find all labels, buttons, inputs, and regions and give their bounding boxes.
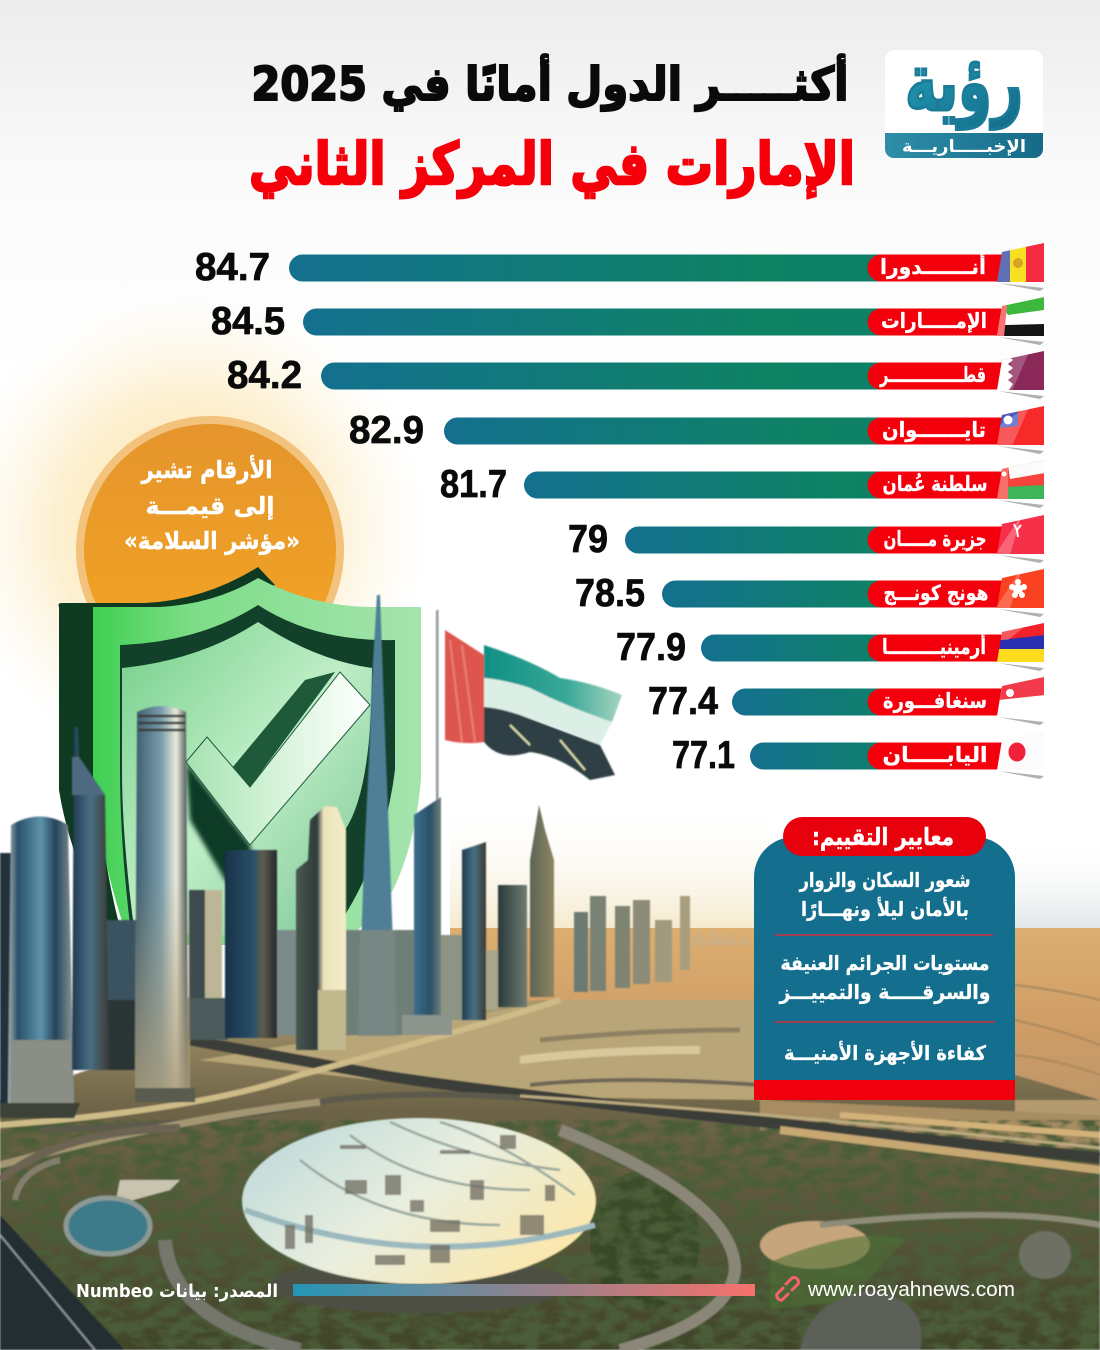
row: Singapore: سنغافـــورة (883, 689, 987, 713)
row: Singapore: 77.4 (648, 680, 718, 723)
row: UAE: 84.5 (211, 300, 285, 343)
shield with check mark (58, 567, 421, 945)
row: Armenia: 77.9 (616, 626, 686, 669)
badge: safety index note (76, 416, 344, 684)
row: Oman: 81.7 (440, 463, 507, 506)
row: Qatar (227, 350, 1045, 399)
panel: evaluation criteria: مستويات الجرائم العنيفة (780, 951, 990, 975)
row: Isle of Man: جزيرة مـــــان (884, 527, 986, 551)
row: Hong Kong: هونج كونـــج (884, 581, 988, 605)
logo: Roayah News: رؤية (905, 36, 1023, 130)
source note: المصدر: بيانات Numbeo (76, 1281, 278, 1302)
horizon haze (450, 800, 770, 940)
row: UAE: الإمـــــارات (881, 309, 987, 333)
panel: evaluation criteria: بالأمان ليلأ ونهـــارًا (801, 896, 969, 921)
panel: evaluation criteria: معايير التقييم: (812, 823, 954, 851)
icon: link (777, 1278, 798, 1300)
sun glow (0, 270, 450, 790)
row: Japan: 77.1 (672, 734, 735, 777)
desert horizon (450, 928, 1100, 1128)
city skyline (0, 595, 690, 1118)
title: أكثـــــر الدول أمانًا في 2025 (252, 54, 849, 111)
horizon haze right (1015, 840, 1100, 930)
row: Isle of Man (568, 514, 1045, 563)
row: Andorra: أنـــــــدورا (880, 252, 986, 279)
row: Oman (440, 459, 1045, 508)
dome building (242, 1118, 596, 1313)
row: Oman: سلطنة عُمان (882, 472, 988, 496)
logo: Roayah News: الإخبـــــاريـــة (902, 137, 1026, 157)
row: Hong Kong (575, 568, 1045, 617)
panel: evaluation criteria: كفاءة الأجهزة الأمنيـــة (784, 1040, 986, 1065)
row: Andorra (195, 242, 1045, 291)
row: Qatar: قطـــــــــــــــر (879, 363, 986, 387)
row: Armenia: أرمينيـــــــــا (882, 632, 986, 659)
ground with roads and gardens (0, 1000, 1100, 1350)
row: Taiwan: 82.9 (349, 409, 424, 452)
badge: safety index note: الأرقام تشير (141, 455, 272, 484)
panel: evaluation criteria: شعور السكان والزوار (799, 868, 970, 892)
row: Armenia (616, 622, 1045, 671)
panel: evaluation criteria (754, 817, 1015, 1100)
row: Japan: اليابـــــان (882, 743, 988, 767)
badge: safety index note: إلى قيمـــة (146, 492, 274, 520)
row: UAE (211, 296, 1045, 345)
badge: safety index note: «مؤشر السلامة» (124, 527, 300, 555)
row: Taiwan: تايـــــــوان (882, 418, 986, 442)
row: Singapore (648, 676, 1045, 725)
panel: evaluation criteria: والسرقـــــة والتمييـــز (779, 980, 990, 1004)
UAE flag on pole (436, 610, 622, 800)
row: Qatar: 84.2 (227, 354, 302, 397)
footer gradient bar (293, 1284, 755, 1296)
subtitle: الإمارات في المركز الثاني (249, 130, 855, 199)
row: Andorra: 84.7 (195, 246, 270, 289)
row: Isle of Man: 79 (568, 518, 608, 561)
row: Japan (673, 740, 1044, 779)
bar chart: safety index by country (195, 242, 1045, 779)
row: Hong Kong: 78.5 (575, 572, 645, 615)
website url: www.roayahnews.com (807, 1279, 1015, 1301)
logo: Roayah News (885, 36, 1043, 158)
row: Taiwan (349, 405, 1045, 454)
